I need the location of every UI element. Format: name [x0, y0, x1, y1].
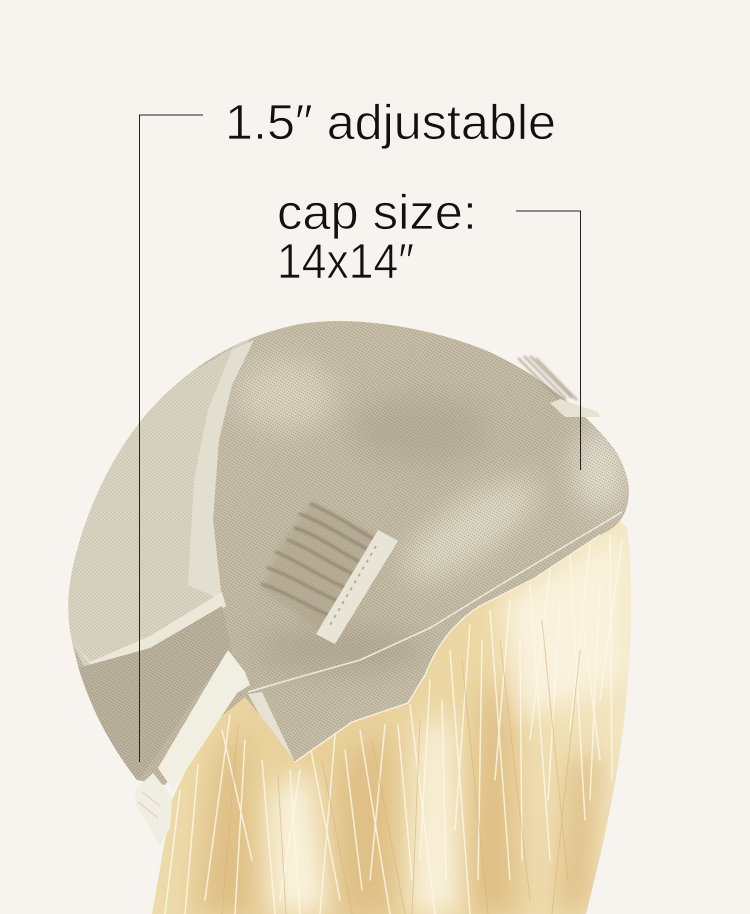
- back comb teeth: [518, 356, 577, 400]
- infographic: wig cap diagram: [68, 104, 632, 914]
- adjustable strap: [158, 650, 250, 790]
- wig cap: [60, 315, 640, 845]
- leader line: adjustable: [140, 115, 203, 762]
- leader line: cap size: [516, 211, 580, 470]
- cap edge highlight: [295, 535, 600, 762]
- front lace panel: [62, 336, 252, 668]
- hair: [152, 521, 632, 914]
- side comb: [262, 502, 398, 644]
- cap mesh body: [60, 315, 640, 795]
- label: adjustable: 1.5″ adjustable: [225, 96, 556, 150]
- comb teeth: [262, 504, 372, 616]
- callout: cap size: [277, 186, 580, 470]
- strap tab: [135, 773, 172, 845]
- callout: 1.5 inch adjustable: [140, 96, 556, 762]
- hairline seam: [248, 512, 622, 692]
- back comb: [518, 356, 600, 417]
- lower side panel: [78, 606, 232, 782]
- front band: [188, 340, 254, 600]
- label: cap size: 14x14″: [277, 235, 414, 289]
- back comb ribbon: [550, 399, 600, 417]
- label: cap size: cap size:: [277, 186, 477, 240]
- comb ribbon: [316, 530, 398, 644]
- comb shadow: [262, 502, 378, 632]
